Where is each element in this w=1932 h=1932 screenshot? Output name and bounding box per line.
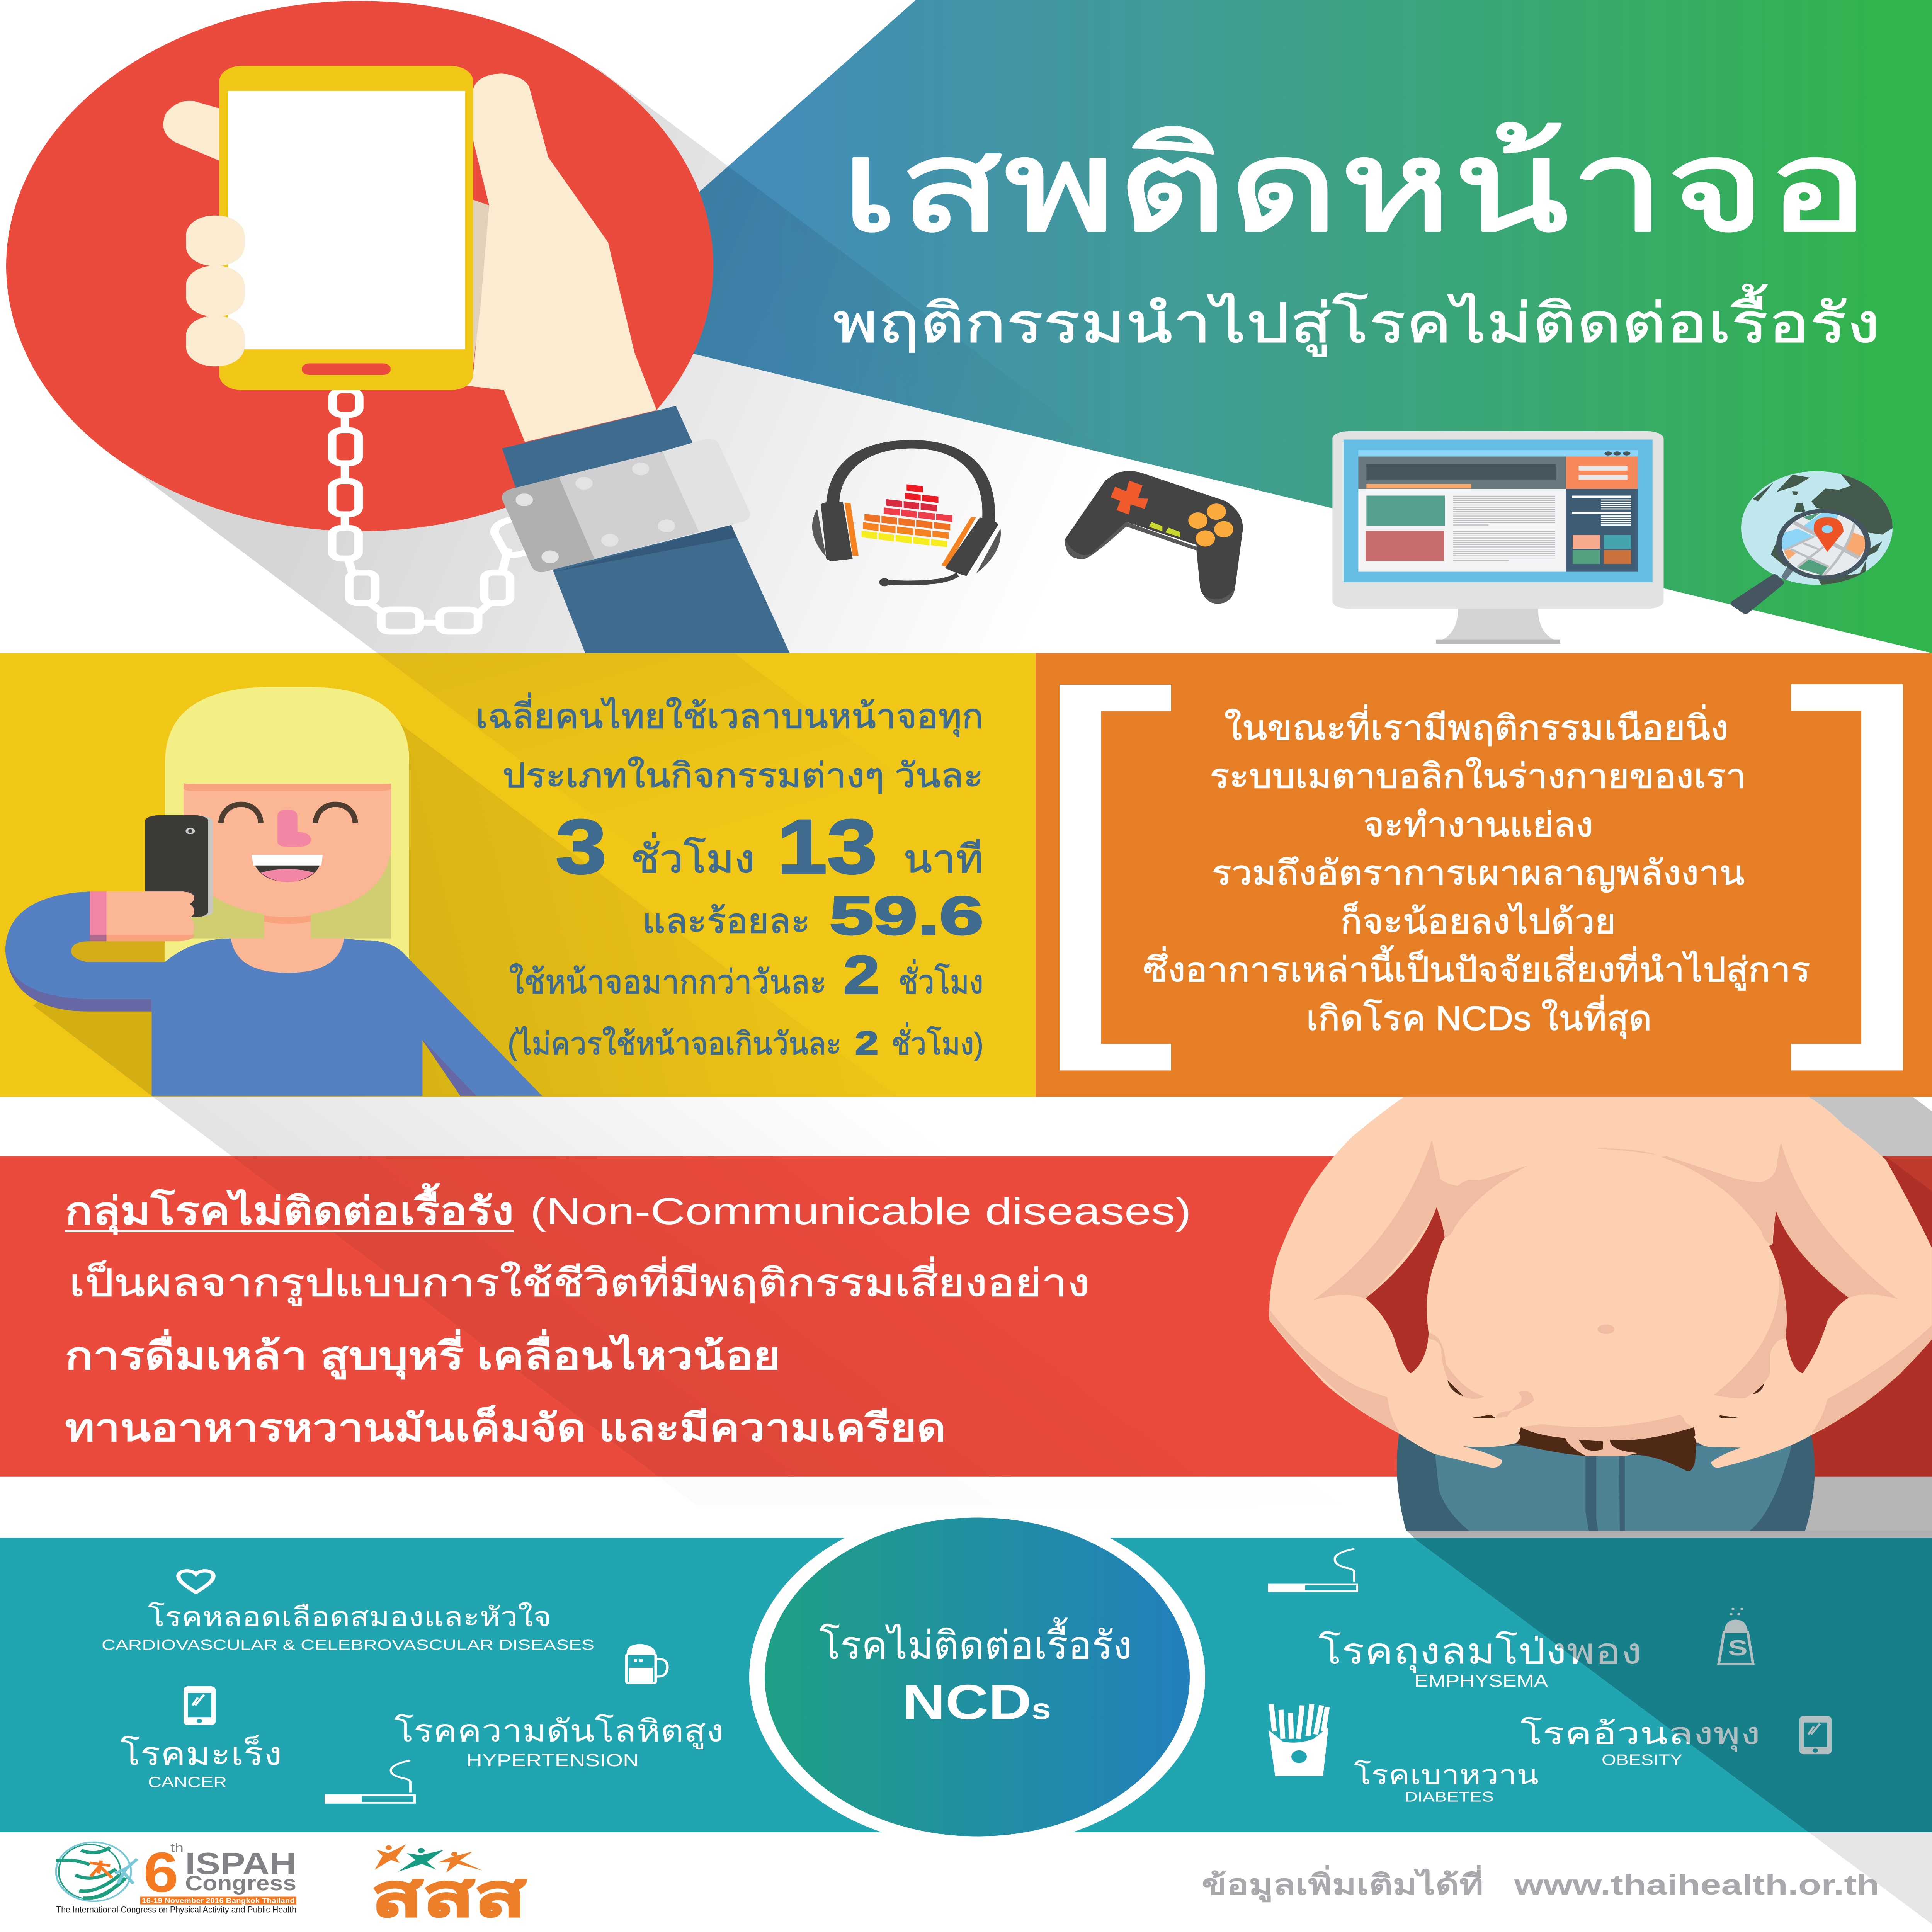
eyes bbox=[221, 804, 355, 823]
sleeve lower bbox=[553, 525, 790, 653]
line: every activity: ประเภทในกิจกรรมต่างๆ วันละ bbox=[502, 757, 983, 795]
thumb behind phone bbox=[163, 101, 219, 161]
illustration: woman using phone bbox=[5, 687, 542, 1096]
hand bbox=[107, 891, 194, 941]
tagline: The International Congress on Physical Activity and Public Health bbox=[56, 1905, 296, 1915]
line 4: ทานอาหารหวานมันเค็มจัด และมีความเครียด bbox=[65, 1405, 946, 1449]
face bbox=[184, 784, 391, 917]
long shadow behind woman bbox=[33, 713, 898, 1097]
icon: smartphone bbox=[184, 1686, 216, 1725]
browser window bbox=[1358, 450, 1638, 572]
heading: กลุ่มโรคไม่ติดต่อเรื้อรัง bbox=[65, 1183, 514, 1235]
icon: smartphone bbox=[1799, 1716, 1832, 1754]
teal list: right bbox=[1268, 1549, 1832, 1805]
line 3: การดื่มเหล้า สูบบุหรี่ เคลื่อนไหวน้อย bbox=[65, 1329, 781, 1380]
mouth bbox=[252, 855, 323, 882]
icon: salt shaker: S bbox=[1728, 1636, 1748, 1660]
emphysema english: EMPHYSEMA bbox=[1414, 1672, 1548, 1691]
Congress: Congress bbox=[185, 1872, 296, 1895]
body shadow on red band bbox=[1507, 1156, 1932, 1477]
circle text NCDs: NCDs bbox=[902, 1674, 1051, 1730]
panel: red NCD definition bbox=[0, 1156, 1932, 1477]
orange text block: จะทำงานแย่ลง bbox=[1363, 806, 1593, 844]
body shadow on white band bbox=[1809, 1097, 1932, 1156]
body shadow below red band bbox=[1546, 1477, 1932, 1538]
bracket left bbox=[1060, 685, 1171, 1070]
long shadow below yellow panel bbox=[153, 1097, 974, 1156]
nose bbox=[277, 810, 311, 847]
phone home button bbox=[302, 364, 391, 375]
armpit creases bbox=[1313, 1140, 1528, 1301]
note: should not exceed: (ไม่ควรใช้หน้าจอเกินวันละ bbox=[508, 1026, 842, 1061]
line: average: เฉลี่ยคนไทยใช้เวลาบนหน้าจอทุก bbox=[476, 692, 983, 737]
ISPAH: ISPAH bbox=[185, 1846, 296, 1881]
date text: 16-19 November 2016 Bangkok Thailand bbox=[142, 1896, 295, 1905]
equalizer bars bbox=[862, 484, 952, 547]
globe mark bbox=[56, 1842, 137, 1901]
three people bbox=[375, 1844, 483, 1872]
phone screen bbox=[228, 91, 465, 349]
lower belly bbox=[1521, 1415, 1694, 1456]
orange text block: เกิดโรค NCDs ในที่สุด bbox=[1306, 995, 1652, 1039]
cancer english: CANCER bbox=[148, 1773, 227, 1791]
cancer thai: โรคมะเร็ง bbox=[120, 1734, 282, 1772]
title: เสพติดหน้าจอ bbox=[840, 114, 1869, 258]
left hand bbox=[1395, 1397, 1532, 1468]
shadow on red band bbox=[232, 1156, 1399, 1477]
arm opening bbox=[71, 941, 165, 962]
panel: title gradient wedge bbox=[554, 0, 1932, 653]
orange text block: รวมถึงอัตราการเผาผลาญพลังงาน bbox=[1212, 854, 1745, 893]
stat: 2 note: 2 bbox=[855, 1024, 878, 1062]
line: more than: ใช้หน้าจอมากกว่าวันละ bbox=[509, 963, 827, 1001]
hypertension thai: โรคความดันโลหิตสูง bbox=[394, 1714, 724, 1749]
red panel text bbox=[65, 1183, 1191, 1449]
stat: 59.6: 59.6 bbox=[830, 885, 983, 946]
pants bbox=[1397, 1434, 1815, 1531]
long shadow on footer bbox=[1809, 1832, 1932, 1924]
emphysema thai: โรคถุงลมโป่งพอง bbox=[1318, 1631, 1642, 1673]
orange text block: ในขณะที่เรามีพฤติกรรมเนือยนิ่ง bbox=[1224, 704, 1728, 747]
icon: french fries bbox=[1269, 1704, 1328, 1776]
panel: orange metabolism note bbox=[1036, 653, 1932, 1097]
gap right of belly bbox=[1769, 1211, 1849, 1373]
torso shadow under pants bbox=[1406, 1531, 1932, 1538]
cardiovascular english: CARDIOVASCULAR & CELEBROVASCULAR DISEASES bbox=[102, 1637, 594, 1653]
stat: 3 hours: 3 bbox=[556, 804, 607, 889]
icon: game controller bbox=[1065, 471, 1243, 604]
icon: salt shaker bbox=[1719, 1608, 1753, 1664]
NCD circle bbox=[749, 1506, 1205, 1848]
unit: hours: ชั่วโมง bbox=[898, 959, 983, 1001]
bracket right bbox=[1791, 684, 1903, 1070]
belt bbox=[1516, 1427, 1696, 1471]
panel: teal NCD list bbox=[0, 1538, 1932, 1832]
orange text block bbox=[1143, 704, 1810, 1039]
teal list: left bbox=[102, 1571, 724, 1804]
unit: hours: ชั่วโมง bbox=[631, 832, 755, 881]
footer: more information label: ข้อมูลเพิ่มเติมได้ที่ bbox=[1202, 1865, 1483, 1903]
fingers bbox=[186, 216, 245, 366]
unit: minutes: นาที bbox=[903, 837, 983, 881]
long shadow of red circle bbox=[136, 68, 1378, 653]
forearm shading bbox=[1269, 1310, 1932, 1434]
panel: yellow stats bbox=[0, 653, 1036, 1097]
subtitle: พฤติกรรมนำไปสู่โรคไม่ติดต่อเรื้อรัง bbox=[833, 284, 1880, 357]
icon: desktop monitor bbox=[1332, 431, 1664, 644]
long shadow on teal band bbox=[1413, 1538, 1932, 1832]
icon: globe with magnifier and map pin bbox=[1731, 469, 1897, 614]
handcuff bbox=[502, 439, 750, 572]
icon: cigarette bbox=[325, 1760, 416, 1804]
icon: heart bbox=[179, 1571, 213, 1592]
hair bbox=[165, 687, 409, 967]
hypertension english: HYPERTENSION bbox=[466, 1751, 639, 1770]
orange text block: ระบบเมตาบอลิกในร่างกายของเรา bbox=[1210, 757, 1746, 796]
label: percent: และร้อยละ bbox=[642, 902, 810, 940]
obesity thai: โรคอ้วนลงพุง bbox=[1520, 1716, 1760, 1752]
circle text thai: โรคไม่ติดต่อเรื้อรัง bbox=[819, 1617, 1132, 1667]
palm bbox=[465, 73, 657, 442]
illustration: overweight torso bbox=[1269, 1097, 1932, 1531]
logotype: สสส bbox=[371, 1862, 526, 1929]
orange text block: ก็จะน้อยลงไปด้วย bbox=[1340, 901, 1616, 940]
faint shadow tail below red band bbox=[659, 1477, 1437, 1506]
belly fold shading bbox=[1714, 1270, 1787, 1398]
obesity english: OBESITY bbox=[1602, 1751, 1682, 1768]
heading english: (Non-Communicable diseases) bbox=[530, 1190, 1191, 1232]
chain bbox=[332, 390, 527, 632]
footer: ThaiHealth logo bbox=[371, 1844, 526, 1929]
red circle bbox=[6, 1, 713, 531]
line 2: เป็นผลจากรูปแบบการใช้ชีวิตที่มีพฤติกรรมเสี่ยงอย่าง bbox=[69, 1257, 1090, 1306]
icon: beer mug bbox=[626, 1644, 667, 1683]
cardiovascular thai: โรคหลอดเลือดสมองและหัวใจ bbox=[148, 1602, 551, 1632]
sleeve upper bbox=[502, 406, 696, 493]
th: th bbox=[170, 1840, 184, 1854]
stat: 13 minutes: 13 bbox=[777, 804, 877, 889]
right hand bbox=[1684, 1399, 1825, 1468]
stats text bbox=[476, 692, 983, 1062]
footer: website url: www.thaihealth.or.th bbox=[1514, 1869, 1879, 1901]
phone body bbox=[219, 66, 473, 390]
gap left of belly bbox=[1366, 1207, 1445, 1373]
heading underline bbox=[65, 1230, 514, 1232]
body silhouette bbox=[1269, 1097, 1932, 1443]
date banner bbox=[140, 1897, 296, 1905]
stat: 2: 2 bbox=[844, 944, 879, 1005]
diabetes english: DIABETES bbox=[1405, 1789, 1494, 1805]
footer: ISPAH logo bbox=[56, 1840, 296, 1915]
diabetes thai: โรคเบาหวาน bbox=[1354, 1760, 1539, 1790]
faint top shadow continuing over yellow bbox=[378, 653, 1036, 1097]
note: hours: ชั่วโมง) bbox=[891, 1022, 983, 1061]
icon: headphones with equalizer bbox=[812, 440, 1001, 586]
icon: cigarette bbox=[1268, 1549, 1358, 1592]
sweater bbox=[5, 950, 152, 1012]
neck bbox=[231, 910, 344, 973]
big 6: 6 bbox=[143, 1840, 179, 1904]
phone bbox=[150, 816, 213, 917]
illustration: hand holding phone chained to wrist bbox=[163, 66, 790, 653]
